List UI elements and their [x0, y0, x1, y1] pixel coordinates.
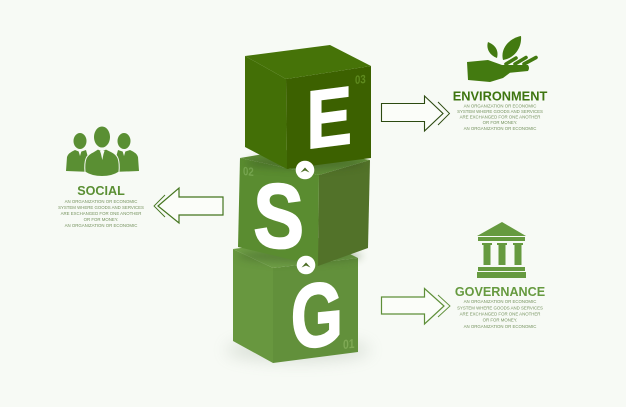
heading: governance: GOVERNANCE	[455, 285, 545, 299]
number 02: 02	[243, 165, 254, 179]
heading: social: SOCIAL	[77, 184, 125, 198]
text: environment description	[457, 104, 543, 131]
icon: business people	[66, 126, 139, 176]
number 03: 03	[355, 73, 366, 87]
cube S	[238, 148, 370, 268]
text: governance description: ARE EXCHANGED FOR ONE ANOTHER	[460, 312, 540, 316]
cube E	[245, 45, 371, 169]
connector badge lower	[297, 256, 315, 274]
text: social description: AN ORGANIZATION OR ECONOMIC	[65, 223, 137, 228]
text: social description: SYSTEM WHERE GOODS AND SERVICES	[58, 205, 144, 210]
connector badge upper	[296, 161, 314, 179]
text: environment description: SYSTEM WHERE GOODS AND SERVICES	[457, 109, 543, 114]
text: governance description: AN ORGANIZATION OR ECONOMIC	[464, 324, 536, 329]
text: social description: AN ORGANIZATION OR ECONOMIC	[65, 199, 137, 204]
text: environment description: AN ORGANIZATION OR ECONOMIC	[464, 104, 536, 108]
text: social description	[58, 199, 144, 228]
letter E: E	[306, 70, 352, 167]
text: environment description: AN ORGANIZATION OR ECONOMIC	[464, 126, 536, 131]
number 01: 01	[343, 337, 355, 352]
text: social description: OR FOR MONEY.	[84, 217, 118, 222]
text: governance description: AN ORGANIZATION OR ECONOMIC	[464, 299, 536, 304]
heading: environment: ENVIRONMENT	[453, 88, 547, 104]
text: governance description: SYSTEM WHERE GOODS AND SERVICES	[457, 306, 543, 310]
icon: hand with leaves	[467, 36, 536, 82]
icon: bank building	[477, 222, 526, 278]
letter S: S	[254, 164, 304, 268]
text: environment description: OR FOR MONEY.	[483, 120, 517, 125]
text: environment description: ARE EXCHANGED FOR ONE ANOTHER	[460, 114, 540, 120]
arrow to environment	[382, 96, 450, 131]
text: governance description: OR FOR MONEY.	[483, 318, 517, 322]
text: governance description	[457, 299, 543, 329]
text: social description: ARE EXCHANGED FOR ONE ANOTHER	[61, 211, 141, 216]
letter G: G	[291, 262, 343, 368]
arrow to social	[154, 188, 223, 223]
cube G	[226, 238, 370, 368]
arrow to governance	[382, 288, 450, 324]
